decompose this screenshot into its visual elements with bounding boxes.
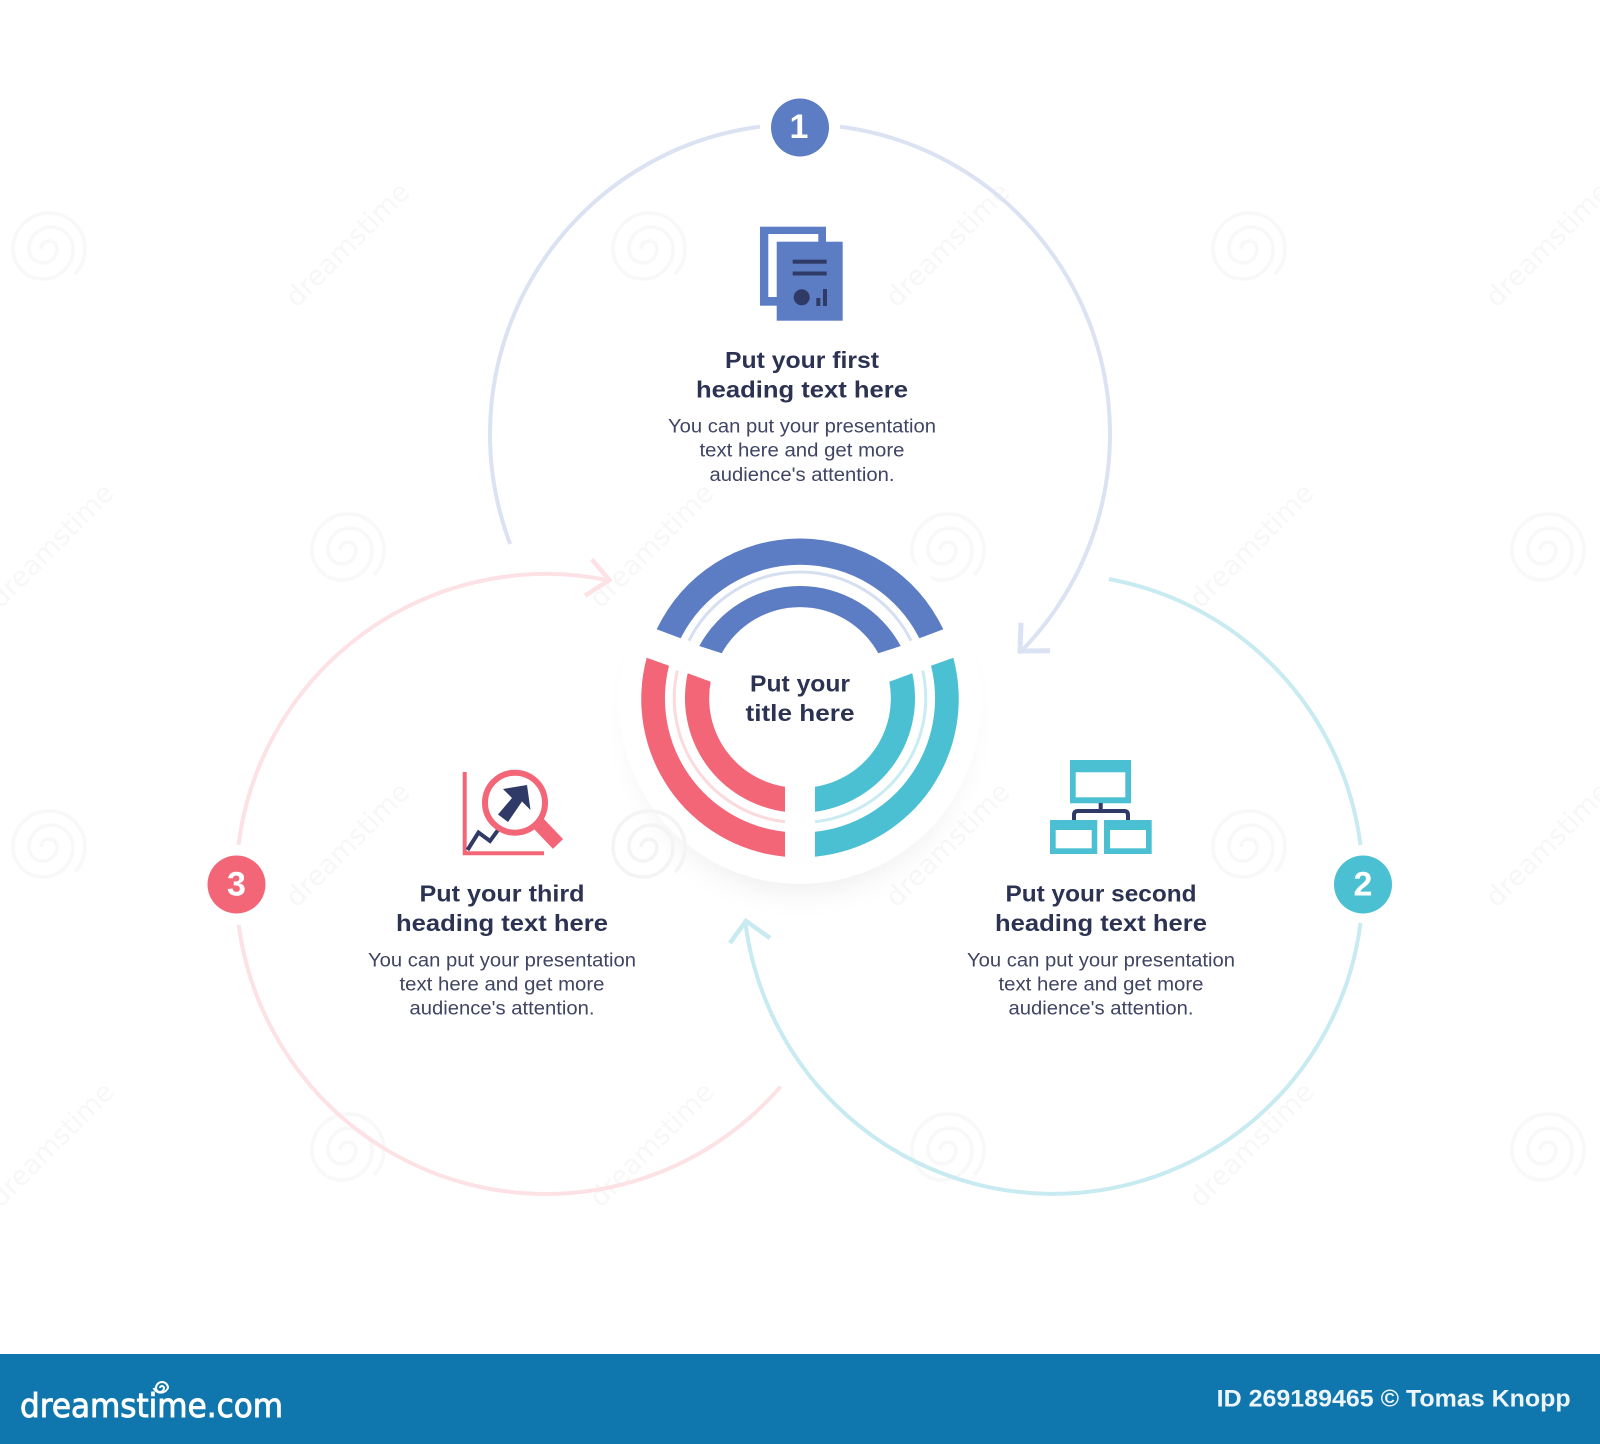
circle 2 arcs with arrow: [730, 579, 1360, 1194]
icon: chart with magnifier: [465, 772, 558, 853]
center title: Put your: [750, 671, 850, 697]
heading and text: first: You can put your presentation: [668, 417, 936, 438]
badge 1: 1: [790, 108, 808, 146]
heading and text: first: [668, 347, 936, 486]
watermark pattern: dreamstime: [1184, 478, 1320, 614]
logo text: dreamstime.com: [20, 1386, 283, 1425]
heading and text: second: audience's attention.: [1008, 999, 1194, 1020]
circle 1 arcs with arrow: [490, 127, 1110, 653]
central ring diagram: [641, 539, 959, 857]
watermark pattern: [0, 177, 1600, 1213]
ring segment: teal: [815, 658, 959, 857]
heading and text: third: You can put your presentation: [368, 950, 636, 971]
circle 3 arcs with arrow: [238, 559, 780, 1194]
heading and text: third: audience's attention.: [410, 999, 594, 1020]
watermark pattern: dreamstime: [584, 478, 720, 614]
heading and text: first: heading text here: [696, 376, 908, 402]
badge 3: [208, 856, 266, 914]
badge 2: [1334, 856, 1392, 914]
heading and text: third: heading text here: [396, 910, 608, 936]
central white disc: [619, 522, 981, 893]
heading and text: second: text here and get more: [998, 974, 1204, 995]
center title: title here: [746, 700, 854, 726]
watermark pattern: dreamstime: [880, 177, 1016, 313]
heading and text: second: heading text here: [995, 910, 1207, 936]
ring segment: blue: [657, 539, 943, 653]
badge 1: [771, 98, 829, 156]
heading and text: first: audience's attention.: [710, 465, 894, 486]
watermark pattern: dreamstime: [584, 1077, 720, 1213]
footer banner: [0, 1354, 1600, 1444]
heading and text: third: Put your third: [420, 881, 584, 907]
heading and text: second: [967, 881, 1235, 1020]
watermark pattern: dreamstime: [880, 777, 1016, 913]
watermark pattern: dreamstime: [280, 177, 416, 313]
icon: organization chart: [1050, 760, 1152, 854]
badge 2: 2: [1354, 866, 1372, 904]
heading and text: third: [368, 881, 636, 1020]
heading and text: first: Put your first: [725, 347, 879, 373]
badge 3: 3: [227, 866, 246, 904]
icon: documents: [760, 227, 843, 321]
image credit: ID 269189465 © Tomas Knopp: [1217, 1386, 1571, 1413]
ring segment: red: [641, 658, 785, 857]
heading and text: third: text here and get more: [400, 974, 604, 995]
watermark pattern: dreamstime: [280, 777, 416, 913]
watermark spiral over disc: [613, 811, 685, 877]
heading and text: second: You can put your presentation: [967, 950, 1235, 971]
watermark pattern: dreamstime: [1184, 1077, 1320, 1213]
logo spiral: [154, 1382, 168, 1393]
center title: [746, 671, 854, 726]
heading and text: first: text here and get more: [700, 441, 904, 462]
heading and text: second: Put your second: [1006, 881, 1196, 907]
